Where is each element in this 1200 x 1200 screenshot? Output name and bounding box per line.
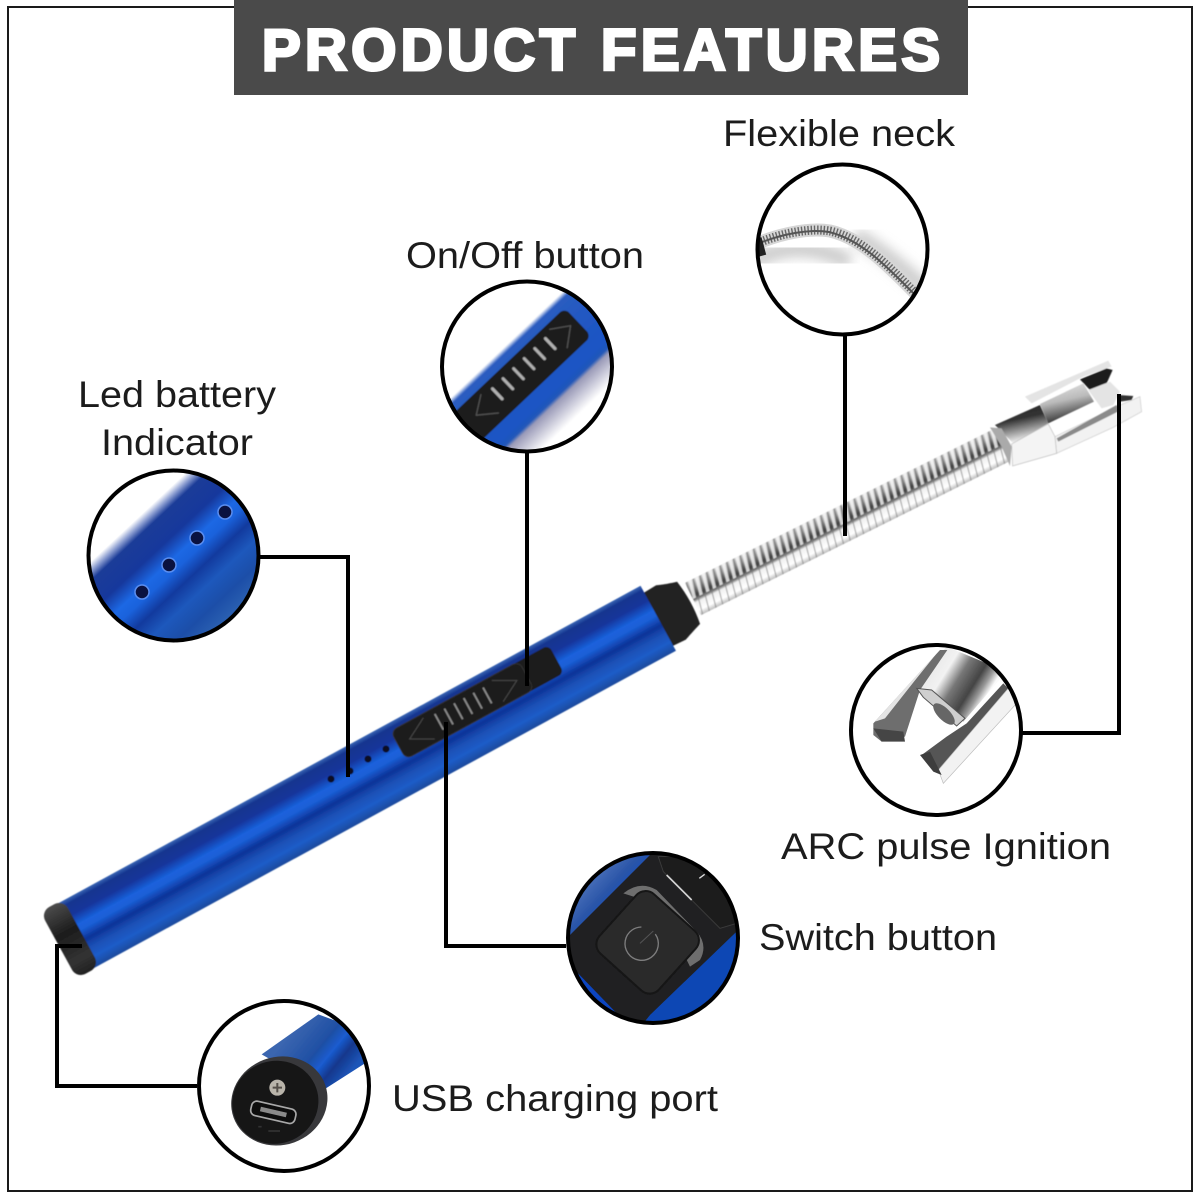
detail photo — [570, 855, 736, 1021]
label: On/Off button — [406, 235, 644, 276]
blue tube — [58, 586, 676, 969]
end cap — [40, 899, 100, 979]
lighter product photo — [40, 361, 1142, 979]
callout: ARC pulse ignition — [781, 645, 1111, 867]
callout: LED battery indicator — [81, 380, 276, 642]
label: USB charging port — [392, 1078, 719, 1119]
label: Flexible neck — [723, 113, 956, 154]
label: ARC pulse Ignition — [781, 826, 1111, 867]
callout: switch button — [560, 850, 997, 1032]
neck collar — [639, 575, 705, 649]
callout: on/off button — [408, 241, 642, 454]
switch arrows — [404, 670, 523, 749]
flexible neck shaft — [685, 429, 1010, 615]
slide switch housing — [391, 645, 564, 759]
connector lines — [57, 335, 1119, 1086]
ring — [199, 1001, 369, 1171]
title banner — [234, 0, 968, 95]
detail photo — [91, 474, 256, 638]
battery LED dots — [328, 746, 390, 782]
ring — [568, 853, 738, 1023]
label — [78, 374, 277, 463]
ring — [88, 470, 258, 640]
detail photo — [752, 230, 925, 297]
arc ignition tip — [990, 361, 1142, 466]
detail photo — [450, 292, 610, 450]
ring — [442, 282, 612, 452]
ring — [851, 645, 1021, 815]
slide switch — [391, 661, 534, 759]
detail photo — [231, 1014, 364, 1146]
title — [262, 18, 940, 83]
callout: flexible neck — [723, 113, 956, 334]
label: Led battery — [78, 374, 277, 415]
label: Indicator — [101, 422, 253, 463]
callout: USB charging port — [199, 1001, 719, 1171]
title: PRODUCT — [262, 18, 575, 83]
body group — [40, 568, 708, 979]
label: Switch button — [759, 917, 997, 958]
switch ridges — [435, 688, 492, 730]
title: FEATURES — [601, 18, 940, 83]
detail photo — [873, 647, 1017, 783]
ring — [758, 164, 928, 334]
